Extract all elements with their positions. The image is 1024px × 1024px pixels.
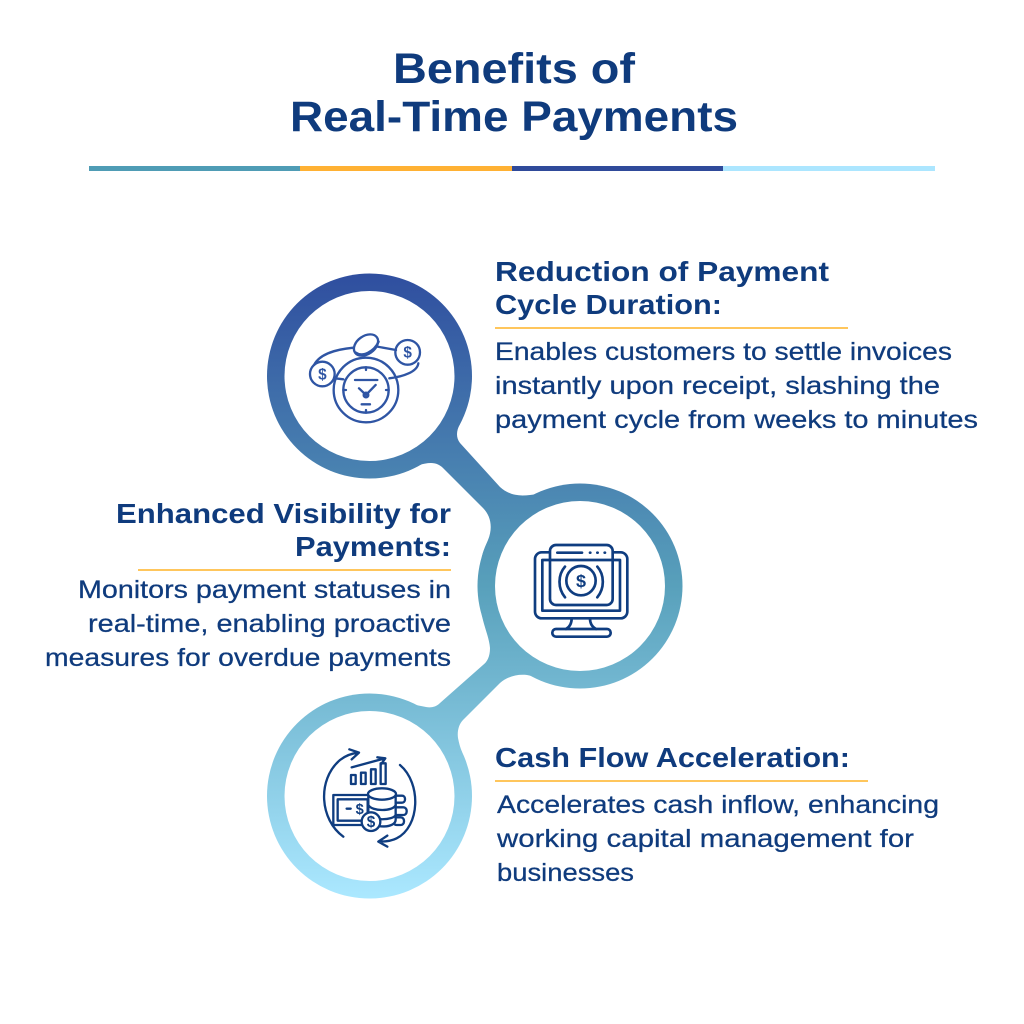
connected ring chain bbox=[267, 274, 682, 898]
text block: enhanced visibility for payments: Enhanced Visibility for bbox=[116, 498, 451, 529]
text block: reduction of payment cycle duration: Cycle Duration: bbox=[495, 289, 722, 320]
title: Real-Time Payments bbox=[290, 93, 738, 141]
icon: cash flow cycle: $ bbox=[367, 814, 376, 831]
text block: cash flow acceleration: Accelerates cash inflow, enhancing bbox=[497, 791, 939, 819]
text block: reduction of payment cycle duration: Reduction of Payment bbox=[495, 256, 829, 287]
text block: reduction of payment cycle duration: Enables customers to settle invoices bbox=[495, 338, 952, 366]
text block: reduction of payment cycle duration bbox=[495, 256, 978, 434]
text block: enhanced visibility for payments: Monitors payment statuses in bbox=[78, 576, 451, 604]
icon: monitor with dollar bbox=[535, 545, 627, 637]
icon: cash flow cycle bbox=[324, 749, 415, 847]
text block: cash flow acceleration: working capital management for bbox=[496, 825, 914, 853]
text block: enhanced visibility for payments: measures for overdue payments bbox=[45, 644, 451, 672]
title underline: four colour segments bbox=[89, 166, 935, 171]
icon: stopwatch with coins bbox=[310, 330, 420, 422]
text block: reduction of payment cycle duration: payment cycle from weeks to minutes bbox=[495, 406, 978, 434]
text block: cash flow acceleration bbox=[495, 742, 939, 887]
text block: enhanced visibility for payments bbox=[45, 498, 451, 672]
icon: monitor with dollar: $ bbox=[576, 571, 586, 591]
text block: enhanced visibility for payments: Payments: bbox=[295, 531, 451, 562]
title: Benefits of bbox=[393, 45, 636, 93]
icon: cash flow cycle: $ bbox=[356, 802, 364, 818]
text block: reduction of payment cycle duration: instantly upon receipt, slashing the bbox=[495, 372, 940, 400]
text block: enhanced visibility for payments: real-time, enabling proactive bbox=[88, 610, 451, 638]
text block: cash flow acceleration: businesses bbox=[497, 859, 634, 887]
text block: cash flow acceleration: Cash Flow Acceleration: bbox=[495, 742, 850, 773]
icon: stopwatch with coins: $ bbox=[403, 345, 412, 362]
title bbox=[290, 45, 738, 141]
icon: stopwatch with coins: $ bbox=[318, 366, 327, 383]
